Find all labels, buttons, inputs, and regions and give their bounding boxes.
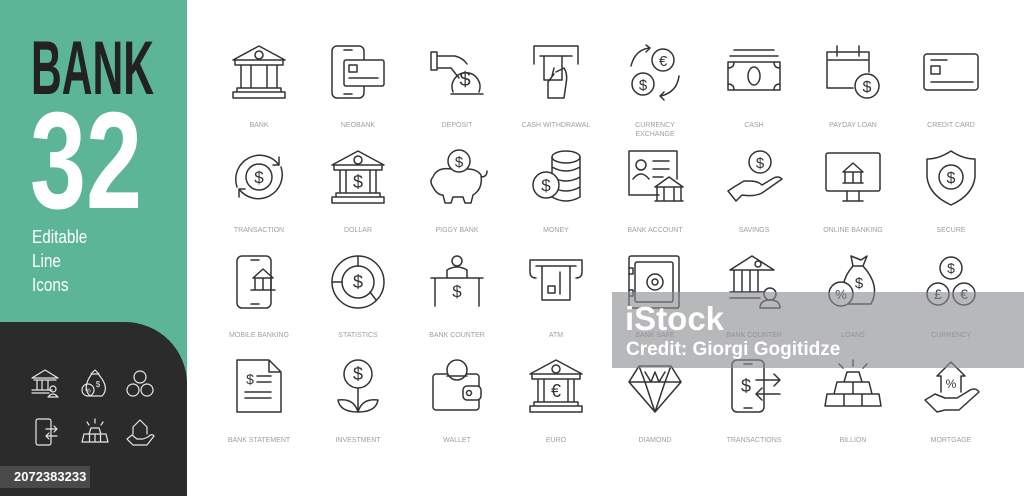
icon: currency exchange: $: [639, 77, 648, 94]
icon: loans: [829, 256, 875, 306]
icon: cash withdrawal: [534, 46, 578, 98]
labels: SECURE: [936, 227, 966, 234]
icon: mortgage: [925, 362, 979, 412]
icon: statistics: [332, 256, 384, 308]
icon: transactions: $: [741, 376, 751, 396]
icon: money: $: [541, 176, 551, 195]
icon: transaction: $: [254, 168, 264, 187]
labels: ONLINE BANKING: [823, 227, 883, 234]
icon: currency exchange: [631, 45, 679, 100]
labels: BILLION: [840, 437, 866, 444]
icon: currency: $: [947, 260, 955, 276]
icon: neobank: [332, 46, 384, 98]
labels: PIGGY BANK: [435, 227, 479, 234]
labels: STATISTICS: [338, 332, 378, 339]
icon: loans: %: [835, 287, 847, 302]
icon: transaction: [236, 155, 282, 199]
subtitle: Icons: [32, 275, 69, 295]
icon: deposit: [431, 52, 483, 94]
icon: euro: €: [551, 381, 561, 401]
icon: piggy bank: [431, 150, 487, 203]
icon: statistics: $: [353, 272, 363, 292]
icon: bank account: [629, 151, 683, 201]
labels: BANK COUNTER: [429, 332, 485, 339]
icon: payday loan: [827, 46, 879, 98]
icon: investment: [338, 360, 378, 412]
icon: bank counter: $: [452, 282, 462, 301]
labels: CURRENCY: [635, 122, 675, 129]
labels: WALLET: [443, 437, 472, 444]
watermark band: Credit: Giorgi Gogitidze: [626, 339, 840, 360]
icon: secure: $: [947, 170, 956, 187]
labels: ATM: [549, 332, 563, 339]
icon: investment: $: [353, 364, 363, 384]
labels: SAVINGS: [739, 227, 770, 234]
subtitle: Line: [32, 251, 61, 271]
icon: wallet: [433, 360, 481, 410]
icon: savings: [728, 151, 782, 201]
icon: currency: £: [934, 286, 942, 302]
icon: payday loan: $: [863, 79, 872, 96]
panel: left sidebar: [0, 0, 187, 496]
icon: secure: [927, 151, 975, 205]
labels: CREDIT CARD: [927, 122, 975, 129]
watermark band: [612, 292, 1024, 368]
icon: loans: $: [855, 275, 864, 292]
labels: PAYDAY LOAN: [829, 122, 877, 129]
labels: BANK COUNTER: [726, 332, 782, 339]
labels: INVESTMENT: [335, 437, 381, 444]
icon: dollar: $: [353, 172, 363, 192]
watermark band: iStock: [625, 300, 725, 337]
preview icons: %: [85, 388, 91, 394]
icon grid: [233, 45, 979, 412]
icon: savings: $: [756, 155, 765, 172]
icon: bank statement: [237, 360, 281, 412]
icon: online banking: [826, 153, 880, 201]
labels: TRANSACTION: [234, 227, 284, 234]
labels: CURRENCY: [931, 332, 971, 339]
icon: bank counter 2: [730, 256, 780, 308]
labels: DEPOSIT: [442, 122, 473, 129]
icon: billion: [825, 360, 881, 406]
labels: EURO: [546, 437, 567, 444]
preview icons: [32, 370, 154, 445]
labels: NEOBANK: [341, 122, 375, 129]
icon: currency: [927, 257, 975, 305]
panel: dark preview: [0, 322, 187, 496]
icon: bank: [233, 46, 285, 98]
labels: CASH WITHDRAWAL: [522, 122, 590, 129]
labels: BANK SAFE: [635, 332, 675, 339]
id badge: 2072383233: [14, 469, 86, 484]
icon: bank counter: [431, 256, 483, 306]
labels: BANK STATEMENT: [228, 437, 291, 444]
labels: DIAMOND: [638, 437, 672, 444]
icon: currency: €: [960, 286, 968, 302]
icon: bank safe: [629, 256, 679, 308]
preview icons: $: [96, 380, 101, 389]
labels: CASH: [744, 122, 764, 129]
icon: bank statement: $: [246, 371, 254, 387]
icon: diamond: [629, 366, 681, 412]
subtitle: [32, 227, 87, 295]
subtitle: Editable: [32, 227, 87, 247]
icon: cash: [728, 50, 780, 90]
icon: euro: [530, 360, 582, 412]
icon: deposit: $: [459, 69, 471, 91]
labels: BANK ACCOUNT: [627, 227, 683, 234]
id badge: [0, 466, 90, 488]
icon: atm: [530, 260, 582, 300]
icon: piggy bank: $: [455, 154, 464, 171]
icon: mortgage: %: [946, 377, 957, 391]
labels: BANK: [249, 122, 269, 129]
labels: MONEY: [543, 227, 569, 234]
icon: credit card: [924, 54, 978, 90]
title: 32: 32: [30, 84, 142, 238]
labels: MORTGAGE: [931, 437, 972, 444]
labels: LOANS: [841, 332, 865, 339]
labels: TRANSACTIONS: [727, 437, 782, 444]
labels: MOBILE BANKING: [229, 332, 289, 339]
icon: currency exchange: €: [659, 53, 668, 70]
labels: [228, 122, 975, 444]
icon: dollar: [332, 151, 384, 203]
labels: DOLLAR: [344, 227, 372, 234]
icon: mobile banking: [237, 256, 275, 308]
title: BANK: BANK: [31, 26, 154, 111]
labels: EXCHANGE: [635, 131, 675, 138]
icon: money: [533, 151, 580, 201]
icon: transactions: [732, 360, 780, 412]
